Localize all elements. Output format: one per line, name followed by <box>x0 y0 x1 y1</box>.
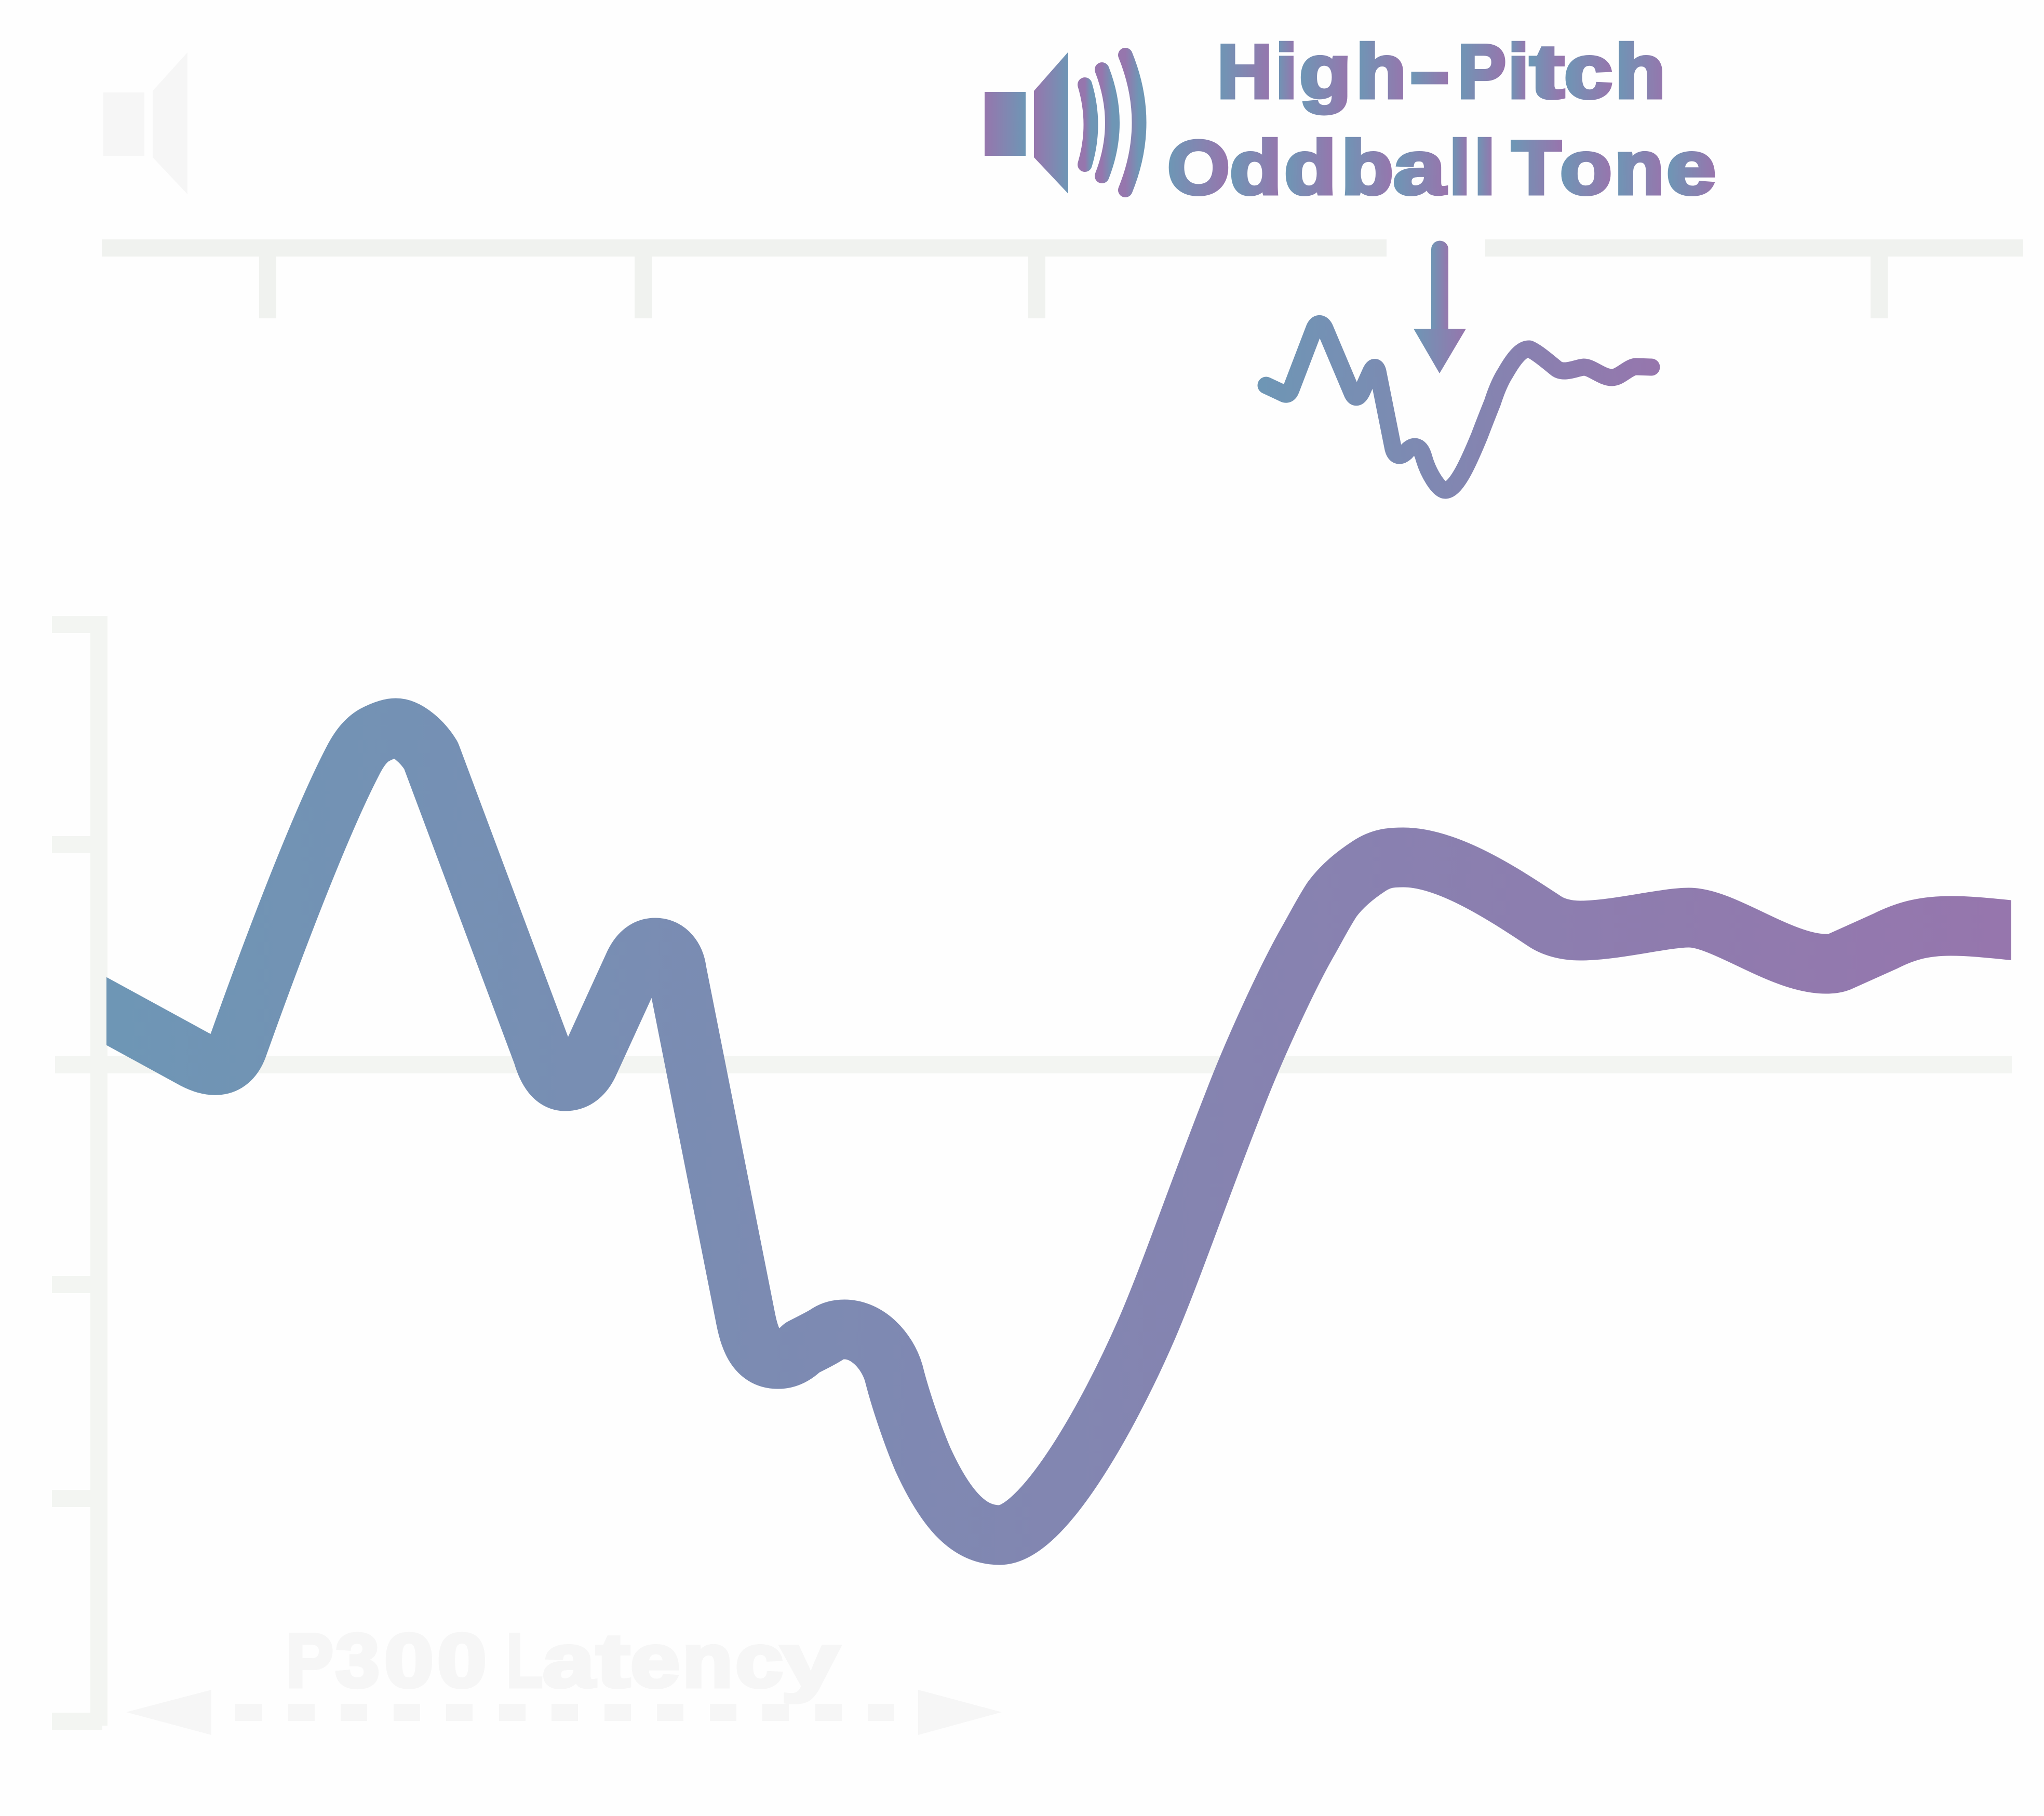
label: P300 Latency: e <box>630 1618 680 1703</box>
heading: High-Pitch Oddball Tone: e <box>1666 125 1716 210</box>
heading: High-Pitch Oddball Tone: P <box>1458 29 1506 114</box>
heading: High-Pitch Oddball Tone: O <box>1167 125 1230 210</box>
label: P300 Latency: c <box>735 1618 783 1703</box>
heading: High-Pitch Oddball Tone: h <box>1615 29 1665 114</box>
heading: High-Pitch Oddball Tone: n <box>1615 125 1664 210</box>
label: P300 Latency: 0 <box>437 1618 487 1703</box>
icon: muted standard-tone speaker <box>103 52 187 194</box>
heading: High-Pitch Oddball Tone: g <box>1299 29 1351 114</box>
heading: High-Pitch Oddball Tone: c <box>1564 29 1612 114</box>
arrow: oddball stimulus onset <box>1414 241 1466 373</box>
heading: High-Pitch Oddball Tone: o <box>1560 125 1612 210</box>
heading: High-Pitch Oddball Tone: l <box>1449 125 1470 210</box>
heading: High-Pitch Oddball Tone: h <box>1356 29 1406 114</box>
heading: High-Pitch Oddball Tone: H <box>1217 29 1272 114</box>
heading: High-Pitch Oddball Tone: d <box>1230 125 1282 210</box>
label: P300 Latency: n <box>682 1618 733 1703</box>
time axis with tick marks <box>102 239 2023 318</box>
label: P300 Latency: 3 <box>335 1618 380 1703</box>
heading: High-Pitch Oddball Tone <box>1167 29 1716 210</box>
small ERP waveform <box>1266 324 1651 490</box>
heading: High-Pitch Oddball Tone: T <box>1512 125 1561 210</box>
label: P300 Latency: 0 <box>384 1618 434 1703</box>
heading: High-Pitch Oddball Tone: b <box>1341 125 1393 210</box>
heading: High-Pitch Oddball Tone: - <box>1409 29 1450 114</box>
large ERP waveform <box>88 728 2030 1535</box>
heading: High-Pitch Oddball Tone: i <box>1275 29 1297 114</box>
label: P300 Latency: a <box>543 1618 596 1703</box>
label: P300 Latency: L <box>506 1618 543 1703</box>
heading: High-Pitch Oddball Tone: t <box>1530 29 1564 114</box>
voltage axis with tick marks <box>52 616 107 1730</box>
label: P300 Latency: t <box>596 1618 630 1703</box>
heading: High-Pitch Oddball Tone: d <box>1284 125 1336 210</box>
heading: High-Pitch Oddball Tone: a <box>1393 125 1446 210</box>
zero baseline <box>55 1056 2012 1073</box>
heading: High-Pitch Oddball Tone: l <box>1474 125 1495 210</box>
label: P300 Latency: P <box>286 1618 333 1703</box>
heading: High-Pitch Oddball Tone: i <box>1508 29 1529 114</box>
dashed double-headed latency arrow <box>126 1690 1002 1735</box>
label: P300 Latency: y <box>781 1618 839 1703</box>
icon: high-pitch speaker with sound waves <box>985 52 1139 194</box>
